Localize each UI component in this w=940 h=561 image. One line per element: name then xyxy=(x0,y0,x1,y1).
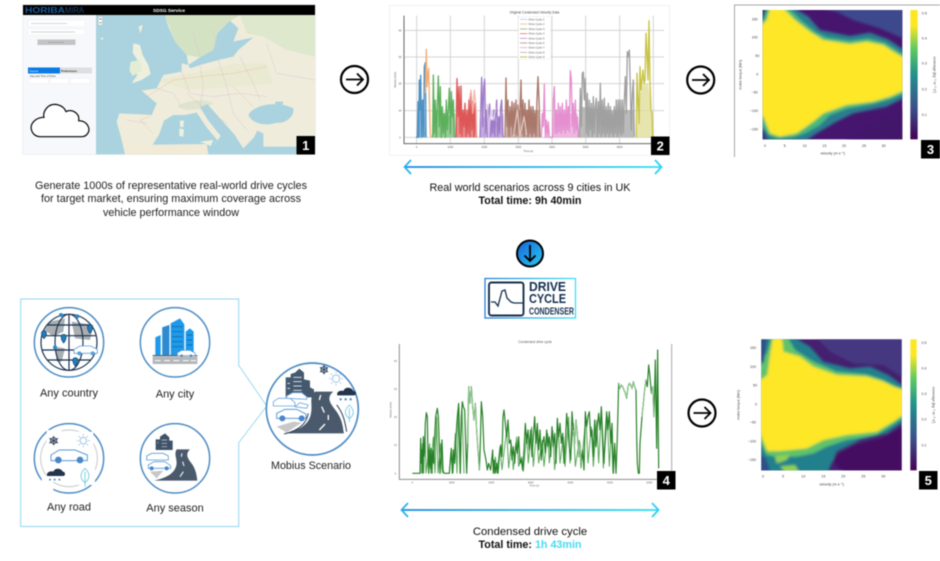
number badge 3: 3 xyxy=(927,142,934,157)
heatmap: 0.3 xyxy=(922,61,927,65)
heatmap: −50 xyxy=(752,91,758,95)
panel 4: condensed drive cycle chart: 1000 xyxy=(449,480,455,484)
velocity plot: 6000 xyxy=(617,145,623,149)
heatmap: −100 xyxy=(750,109,758,113)
logo: drive cycle condenser xyxy=(485,278,576,318)
velocity plot: 20 xyxy=(399,82,402,86)
panel 4: condensed drive cycle chart: Time (s) xyxy=(530,484,539,488)
velocity plot: 0 xyxy=(416,145,418,149)
arrow: condensed duration span xyxy=(402,503,658,517)
label: any city: Any city xyxy=(156,388,195,400)
heatmap: 0.3 xyxy=(921,392,927,396)
heatmap: 0.5 xyxy=(921,341,927,345)
text: condensed drive cycle caption: Total time: 1h 43min xyxy=(478,539,582,551)
arrow: step 1 to step 2 xyxy=(341,66,368,93)
heatmap: 50 xyxy=(753,384,757,388)
map of Europe xyxy=(96,15,315,154)
chart legend: Drive Cycle 8 xyxy=(529,50,545,54)
panel 3: original coverage heatmap xyxy=(734,5,940,158)
velocity plot: Time (s) xyxy=(524,149,533,153)
panel 4: condensed drive cycle chart: Velocity (m/s) xyxy=(388,402,392,418)
text: step 1 description: Generate 1000s of representative real-world drive cycles xyxy=(35,180,307,192)
heatmap: 0.2 xyxy=(921,418,927,422)
velocity plot: 10 xyxy=(399,109,402,113)
panel 4: condensed drive cycle chart: 6000 xyxy=(646,480,653,484)
heatmap: 150 xyxy=(752,17,758,21)
header bar: HORIBA xyxy=(25,5,65,15)
chart legend: Drive Cycle 2 xyxy=(529,22,545,26)
heatmap: coverage [kg⁻¹ m⁻² s²] xyxy=(932,56,936,93)
heatmap: 0 xyxy=(762,474,764,478)
header bar: SDSG Service xyxy=(153,8,185,14)
panel 4: condensed drive cycle chart: 5000 xyxy=(607,480,613,484)
heatmap: 25 xyxy=(861,474,865,478)
number badge 1: 1 xyxy=(302,138,309,153)
panel 4: condensed drive cycle chart: 3000 xyxy=(528,480,534,484)
number badge 4 xyxy=(657,471,676,490)
heatmap: 5 xyxy=(784,144,786,148)
heatmap xyxy=(739,7,936,155)
heatmap: motor torque (Nm) xyxy=(739,60,743,90)
number badge 5: 5 xyxy=(925,473,932,488)
velocity plot: Velocity (m/s) xyxy=(393,72,397,88)
logo: drive cycle condenser: CYCLE xyxy=(529,291,566,306)
logo: drive cycle condenser: DRIVE xyxy=(529,279,566,294)
text: step 1 description: for target market, ensuring maximum coverage across xyxy=(41,193,301,205)
heatmap: 50 xyxy=(755,54,759,58)
panel 4: condensed drive cycle chart: 20 xyxy=(394,415,397,419)
heatmap: 15 xyxy=(821,474,825,478)
label: any season: Any season xyxy=(146,502,204,514)
heatmap: 0.4 xyxy=(922,36,927,40)
heatmap: 30 xyxy=(881,474,885,478)
logo: drive cycle condenser: CONDENSER xyxy=(529,306,575,318)
text: condensed drive cycle caption xyxy=(473,526,587,551)
velocity plot: 0 xyxy=(399,135,401,139)
number badge 2: 2 xyxy=(657,138,664,154)
heatmap: 0 xyxy=(755,402,757,406)
panel 4: condensed drive cycle chart: 40 xyxy=(394,359,397,363)
panel 4: condensed drive cycle chart: 10 xyxy=(394,443,397,447)
header bar xyxy=(23,5,315,15)
panel: scenario options xyxy=(21,299,266,526)
heatmap: −150 xyxy=(748,458,756,462)
panel 2: original velocity chart xyxy=(390,6,670,156)
heatmap: coverage [kg⁻¹ m⁻² s²] xyxy=(932,387,936,423)
chart legend: Drive Cycle 5 xyxy=(529,36,545,40)
service form controls: Source xyxy=(30,69,39,73)
velocity plot: 40 xyxy=(399,28,402,32)
chart legend: Drive Cycle 9 xyxy=(529,55,545,59)
heatmap: 0.5 xyxy=(922,11,927,15)
heatmap: 10 xyxy=(803,144,807,148)
number badge 5 xyxy=(919,471,938,490)
heatmap: 25 xyxy=(862,144,866,148)
arrow: step 2 to step 3 xyxy=(687,66,714,94)
heatmap: 0 xyxy=(756,72,758,76)
heatmap: 0 xyxy=(764,144,766,148)
number badge 2 xyxy=(651,136,670,155)
velocity plot: Original Condensed Velocity Data xyxy=(509,10,559,14)
panel 4: condensed drive cycle chart: 2000 xyxy=(488,480,495,484)
heatmap: velocity (m s⁻¹) xyxy=(819,483,844,487)
service form controls: Preferences xyxy=(61,69,77,73)
velocity plot: 1000 xyxy=(447,145,454,149)
text: original drive cycle caption: Real world scenarios across 9 cities in UK xyxy=(430,182,631,194)
service form controls xyxy=(28,20,92,84)
filled spike bodies xyxy=(417,83,654,137)
number badge 3 xyxy=(921,140,940,158)
icon: any road conditions xyxy=(34,424,104,493)
velocity plot: 3000 xyxy=(515,145,522,149)
arrow: original duration span xyxy=(404,160,662,174)
velocity plot: 7000 xyxy=(650,145,657,149)
heatmap: 30 xyxy=(882,144,886,148)
text: original drive cycle caption: Total time: 9h 40min xyxy=(478,195,582,207)
panel 4: condensed drive cycle chart: 0 xyxy=(395,471,397,475)
heatmap: 150 xyxy=(750,346,756,350)
text: step 1 description xyxy=(35,180,307,219)
heatmap: velocity (m s⁻¹) xyxy=(820,151,845,155)
heatmap: 0.4 xyxy=(921,366,927,370)
velocity plot: 30 xyxy=(399,55,402,59)
velocity plot xyxy=(393,10,664,153)
number badge 4: 4 xyxy=(663,473,671,488)
panel 4: condensed drive cycle chart: 0 xyxy=(412,480,414,484)
panel 4: condensed drive cycle chart: 4000 xyxy=(567,480,574,484)
panel 1: SDSG service map screenshot xyxy=(22,4,316,155)
icon: cloud xyxy=(31,104,89,137)
icon: any country globe xyxy=(34,308,104,377)
panel 4: condensed drive cycle chart xyxy=(388,340,676,490)
heatmap: 100 xyxy=(752,36,758,40)
velocity plot: 2000 xyxy=(481,145,488,149)
chart legend: Drive Cycle 7 xyxy=(529,46,545,50)
icon: mobius scenario xyxy=(266,363,358,455)
label: mobius scenario: Mobius Scenario xyxy=(271,460,351,472)
label: any road: Any road xyxy=(47,502,91,514)
text: step 1 description: vehicle performance window xyxy=(103,207,239,219)
panel 4: condensed drive cycle chart: 30 xyxy=(394,387,397,391)
arrow: step 4 to step 5 xyxy=(688,400,716,426)
heatmap xyxy=(737,335,936,487)
chart legend: Drive Cycle 4 xyxy=(529,32,545,36)
heatmap: 15 xyxy=(822,144,826,148)
chart legend: Drive Cycle 3 xyxy=(529,27,545,31)
service form controls: Day and Time of Drive xyxy=(30,74,56,78)
chart legend: Drive Cycle 1 xyxy=(529,17,545,21)
heatmap: 0.1 xyxy=(922,113,927,117)
heatmap: 10 xyxy=(801,474,805,478)
heatmap: −50 xyxy=(750,421,756,425)
text: original drive cycle caption xyxy=(430,182,631,207)
arrow: condensing step xyxy=(517,240,543,266)
number badge 1 xyxy=(296,136,315,154)
velocity plot: 5000 xyxy=(583,145,589,149)
heatmap: motor torque (Nm) xyxy=(737,390,741,420)
heatmap: −100 xyxy=(748,439,756,443)
panel 5: condensed coverage heatmap xyxy=(737,335,938,490)
heatmap: −150 xyxy=(750,128,758,132)
chart legend xyxy=(518,17,551,59)
heatmap: 20 xyxy=(842,144,846,148)
heatmap: 20 xyxy=(841,474,845,478)
label: any country: Any country xyxy=(40,388,98,400)
velocity plot: 4000 xyxy=(549,145,555,149)
heatmap: 5 xyxy=(782,474,784,478)
header bar: MIRA xyxy=(65,6,85,15)
heatmap: 100 xyxy=(750,365,756,369)
heatmap: 0.1 xyxy=(921,443,927,447)
heatmap: 0.2 xyxy=(922,88,927,92)
text: condensed drive cycle caption: Condensed drive cycle xyxy=(473,526,587,538)
panel 4: condensed drive cycle chart: Condensed drive cycle xyxy=(518,340,552,344)
icon: any season road scene xyxy=(140,424,210,493)
icon: any city skyline xyxy=(140,308,210,377)
chart legend: Drive Cycle 6 xyxy=(529,41,545,45)
